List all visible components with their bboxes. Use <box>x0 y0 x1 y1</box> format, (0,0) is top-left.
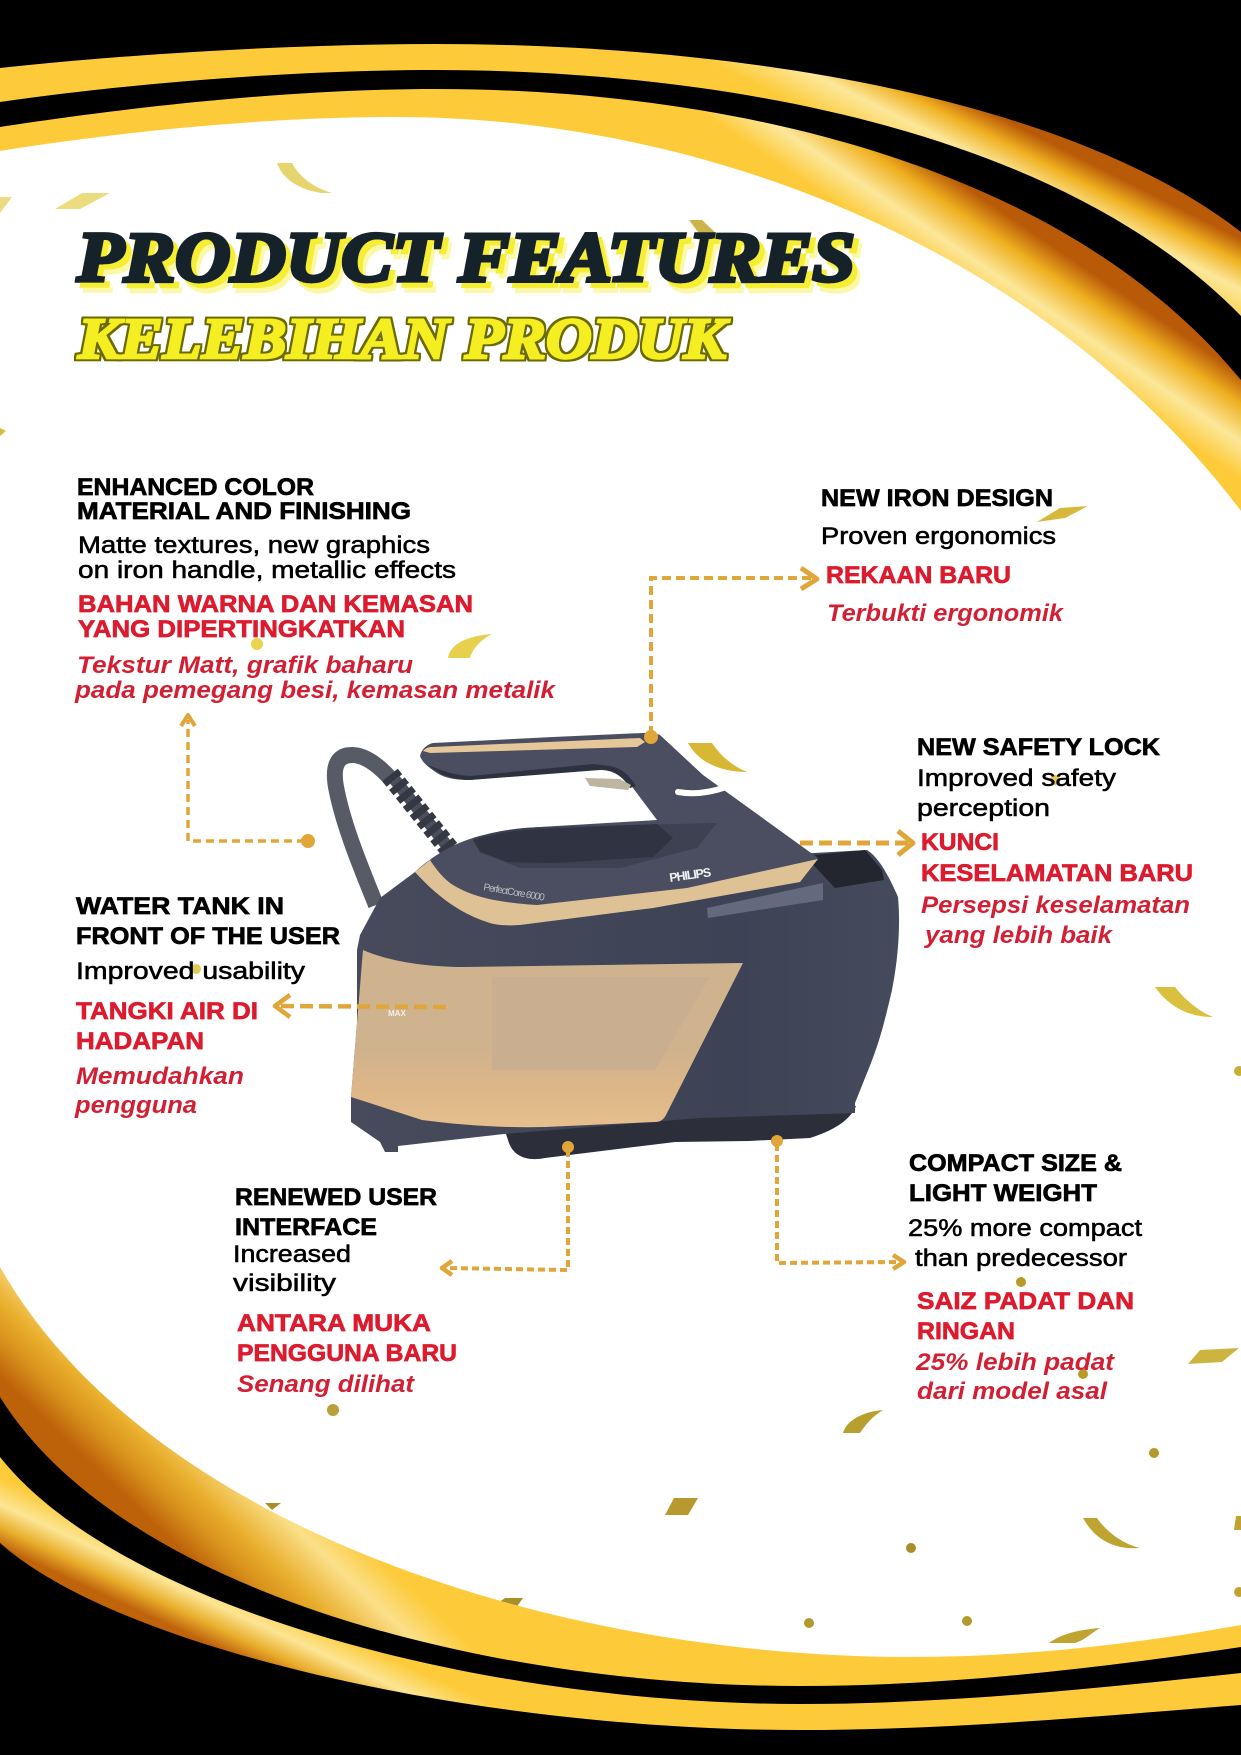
text block: water tank: pengguna <box>74 1092 197 1119</box>
text block: enhanced color material: Matte textures, new graphics <box>78 532 430 559</box>
text block: new iron design: REKAAN BARU <box>826 562 1011 589</box>
brand logo: PHILIPS <box>668 865 712 885</box>
text block: compact size: 25% lebih padat <box>915 1349 1115 1376</box>
text block: enhanced color material: YANG DIPERTINGKATKAN <box>78 616 405 643</box>
text block: water tank <box>74 893 340 1119</box>
text block: water tank: Memudahkan <box>76 1063 244 1090</box>
text block: enhanced color material: MATERIAL AND FINISHING <box>77 498 411 525</box>
iron recess dark <box>473 824 673 863</box>
text block: new safety lock: KUNCI <box>921 829 999 856</box>
iron handle and neck <box>415 733 818 925</box>
text block: water tank: Improved usability <box>76 958 305 985</box>
text block: water tank: HADAPAN <box>76 1028 204 1055</box>
text block: new iron design: Terbukti ergonomik <box>827 600 1065 627</box>
text block: compact size: LIGHT WEIGHT <box>909 1180 1097 1207</box>
text block: new safety lock: KESELAMATAN BARU <box>921 860 1193 887</box>
text block: renewed user interface <box>233 1184 457 1398</box>
text block: renewed user interface: Senang dilihat <box>237 1371 415 1398</box>
text block: new safety lock: perception <box>917 795 1050 822</box>
iron recess outer band <box>473 823 717 868</box>
text block: enhanced color material: ENHANCED COLOR <box>77 474 314 501</box>
text block: renewed user interface: visibility <box>233 1270 336 1297</box>
handle underside shadow <box>428 764 636 788</box>
text block: compact size: COMPACT SIZE & <box>909 1150 1122 1177</box>
subtitle: KELEBIHAN PRODUK <box>77 306 730 371</box>
bottom cord tray <box>504 1106 856 1159</box>
text block: compact size: 25% more compact <box>908 1215 1142 1242</box>
cord <box>335 755 390 905</box>
text block: new iron design: Proven ergonomics <box>821 523 1056 550</box>
iron tan rim <box>415 859 818 925</box>
text block: new safety lock <box>917 734 1193 949</box>
text block: new safety lock: Persepsi keselamatan <box>921 892 1190 919</box>
title: PRODUCT FEATURES <box>76 219 855 297</box>
water tank <box>351 950 743 1127</box>
text block: compact size: SAIZ PADAT DAN <box>917 1288 1134 1315</box>
white indicator light <box>678 787 726 793</box>
text block: compact size: dari model asal <box>917 1378 1108 1405</box>
model name: PerfectCore 6000 <box>482 882 546 904</box>
text block: compact size: RINGAN <box>917 1318 1015 1345</box>
text block: compact size <box>908 1150 1142 1405</box>
arrow: water tank <box>275 995 446 1017</box>
text block: enhanced color material: BAHAN WARNA DAN KEMASAN <box>78 591 473 618</box>
handle tan stripe <box>423 738 645 753</box>
text block: enhanced color material: pada pemegang besi, kemasan metalik <box>74 677 557 704</box>
arrow: renewed user interface <box>442 1141 574 1275</box>
text block: enhanced color material: Tekstur Matt, grafik baharu <box>77 652 413 679</box>
text block: water tank: FRONT OF THE USER <box>76 923 340 950</box>
text block: renewed user interface: RENEWED USER <box>235 1184 437 1211</box>
text block: enhanced color material <box>74 474 557 704</box>
text block: new safety lock: yang lebih baik <box>924 922 1114 949</box>
arrow: enhanced color material <box>181 715 315 848</box>
tank max mark: MAX <box>388 1009 406 1018</box>
handle trigger <box>585 778 631 790</box>
text block: new iron design <box>821 485 1065 627</box>
text block: water tank: WATER TANK IN <box>76 893 284 920</box>
text block: new safety lock: Improved safety <box>917 765 1116 792</box>
text block: renewed user interface: INTERFACE <box>235 1214 377 1241</box>
steam iron product illustration <box>335 733 899 1159</box>
arrow: new safety lock <box>800 831 913 855</box>
cord strain relief <box>390 775 450 850</box>
text block: renewed user interface: Increased <box>233 1241 351 1268</box>
text block: renewed user interface: ANTARA MUKA <box>237 1310 431 1337</box>
water tank inner reflection <box>492 977 710 1070</box>
dock <box>805 850 884 888</box>
text block: renewed user interface: PENGGUNA BARU <box>237 1340 457 1367</box>
arrow: new iron design <box>644 568 817 744</box>
text block: enhanced color material: on iron handle, metallic effects <box>78 557 456 584</box>
bottom curved gold and black bands <box>0 1267 1241 1755</box>
light top facet <box>707 883 823 918</box>
steam generator base <box>351 850 899 1152</box>
text block: water tank: TANGKI AIR DI <box>76 998 258 1025</box>
text block: compact size: than predecessor <box>915 1245 1127 1272</box>
top curved gold and black bands <box>0 0 1241 511</box>
text block: new safety lock: NEW SAFETY LOCK <box>917 734 1160 761</box>
arrow: compact size <box>771 1135 904 1269</box>
text block: new iron design: NEW IRON DESIGN <box>821 485 1053 512</box>
